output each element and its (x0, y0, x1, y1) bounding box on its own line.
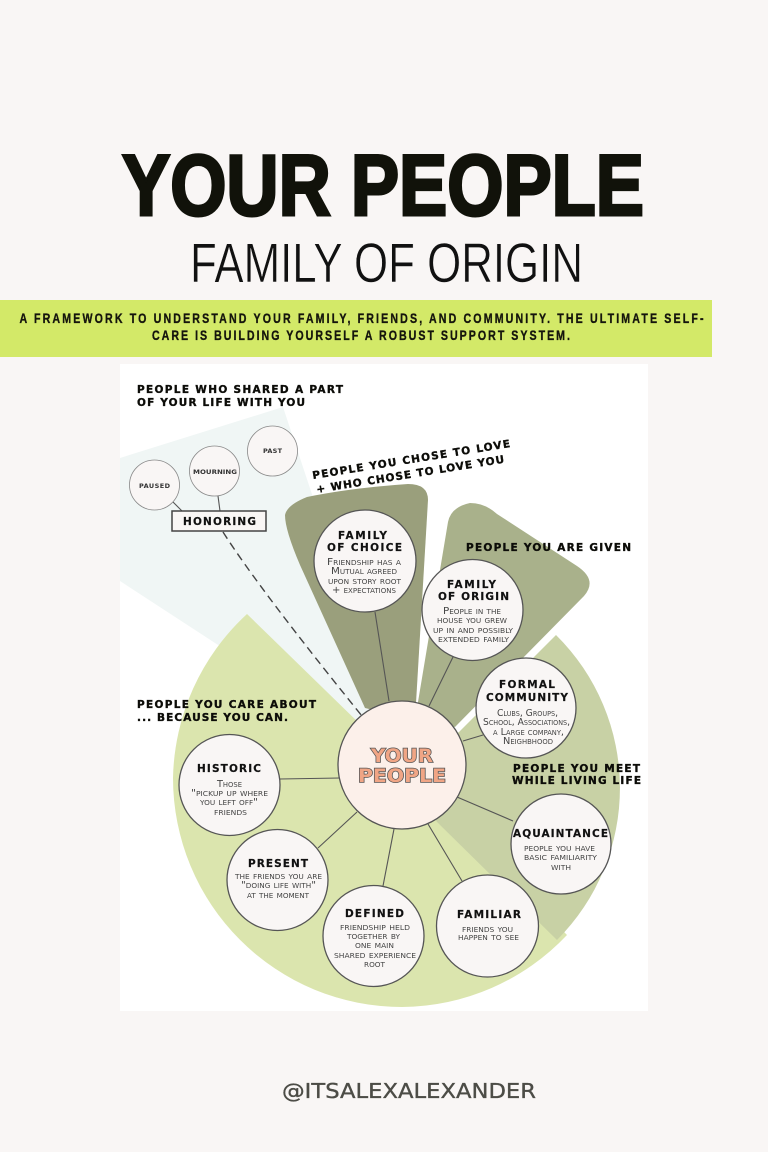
subtitle: FAMILY OF ORIGIN (190, 231, 583, 294)
node: past (248, 426, 298, 476)
node: defined: together by (346, 931, 401, 942)
heading: chose to love: + WHO CHOSE TO LOVE YOU (316, 454, 505, 496)
node: formal community: COMMUNITY (486, 692, 568, 704)
heading: people you meet (512, 763, 641, 787)
sector: family of choice (285, 484, 428, 720)
node: family of origin: house you grew (437, 615, 507, 626)
node: defined: one main (355, 940, 394, 951)
node: family of choice: Mutual agreed (331, 566, 397, 577)
node: familiar (436, 875, 538, 977)
node: defined (323, 886, 424, 986)
heading: chose to love: PEOPLE YOU CHOSE TO LOVE (312, 438, 511, 482)
node: family of origin: People in the (443, 606, 501, 617)
node: family of choice: OF CHOICE (327, 542, 402, 554)
node: mourning: MOURNING (193, 468, 237, 476)
node: formal community: FORMAL (499, 679, 555, 691)
node: present: the friends you are (234, 871, 322, 882)
centre: your people (338, 701, 466, 829)
footer handle: @ITSALEXALEXANDER (282, 1079, 536, 1103)
node: family of origin: FAMILY (447, 579, 496, 591)
node: past: PAST (263, 447, 283, 455)
node: family of choice: upon story root (328, 576, 402, 587)
node: formal community (476, 658, 576, 758)
node: family of origin (422, 560, 523, 660)
node: aquaintance (511, 794, 611, 894)
intro banner: A FRAMEWORK TO UNDERSTAND YOUR FAMILY, FRIENDS, AND COMMUNITY. THE ULTIMATE SELF- (20, 311, 703, 326)
node: present (227, 830, 328, 930)
node: historic (179, 734, 280, 836)
centre: your people: YOUR (370, 745, 433, 767)
sector: honoring (120, 407, 402, 765)
node: present: PRESENT (248, 858, 309, 870)
node: familiar: happen to see (458, 932, 519, 943)
dashed connector: honoring (223, 532, 362, 716)
heading: people you meet: WHILE LIVING LIFE (512, 775, 641, 787)
node: formal community: Neighbhood (503, 736, 553, 747)
intro banner: CARE IS BUILDING YOURSELF A ROBUST SUPPORT SYSTEM. (152, 328, 570, 343)
connector lines (173, 496, 513, 886)
node: historic: Those (216, 779, 242, 790)
node: formal community: Clubs, Groups, (497, 708, 558, 719)
node: defined: DEFINED (345, 908, 404, 920)
node: aquaintance: with (551, 862, 571, 873)
node: historic: "pickup up where (191, 788, 268, 799)
node: formal community: a Large company, (493, 727, 564, 738)
node: family of choice: FAMILY (338, 530, 387, 542)
node: family of origin: OF ORIGIN (438, 591, 509, 603)
node: familiar: FAMILIAR (457, 909, 521, 921)
intro banner (0, 300, 712, 357)
node: defined: shared experience (334, 950, 416, 961)
heading: shared a part (137, 384, 344, 409)
heading: care about: PEOPLE YOU CARE ABOUT (137, 699, 317, 711)
node: defined: friendship held (340, 922, 410, 933)
heading: shared a part: PEOPLE WHO SHARED A PART (137, 384, 344, 396)
heading: people you are given: PEOPLE YOU ARE GIVEN (466, 542, 631, 554)
sector: people you care about (173, 614, 567, 1007)
sector: family of origin (415, 503, 590, 727)
node: present: at the moment (247, 890, 310, 901)
node: family of choice (314, 510, 416, 612)
node: paused (130, 460, 180, 510)
node: family of origin: extended family (438, 634, 510, 645)
node: historic: HISTORIC (197, 763, 261, 775)
node: present: "doing life with" (241, 880, 316, 891)
node: aquaintance: basic familiarity (524, 852, 598, 863)
title: YOUR PEOPLE (122, 138, 644, 234)
panel: diagram (120, 364, 648, 1011)
heading: care about (137, 699, 317, 724)
centre: your people: PEOPLE (358, 765, 446, 787)
node: family of origin: up in and possibly (433, 625, 514, 636)
node: mourning (190, 446, 240, 496)
node: defined: root (364, 959, 386, 970)
heading: shared a part: OF YOUR LIFE WITH YOU (137, 397, 305, 409)
node: aquaintance: AQUAINTANCE (513, 828, 608, 840)
node: historic: you left off" (199, 797, 258, 808)
node: aquaintance: people you have (524, 843, 595, 854)
heading: people you meet: PEOPLE YOU MEET (513, 763, 641, 775)
node: honoring: HONORING (183, 516, 256, 528)
node: honoring (172, 511, 266, 531)
heading: care about: ... BECAUSE YOU CAN. (137, 712, 288, 724)
node: historic: friends (214, 807, 248, 818)
node: family of choice: + expectations (332, 585, 397, 596)
node: paused: PAUSED (139, 482, 171, 490)
node: familiar: friends you (462, 924, 513, 935)
node: formal community: School, Associations, (483, 717, 570, 728)
node: family of choice: Friendship has a (327, 557, 401, 568)
sector: people you meet (402, 635, 620, 940)
